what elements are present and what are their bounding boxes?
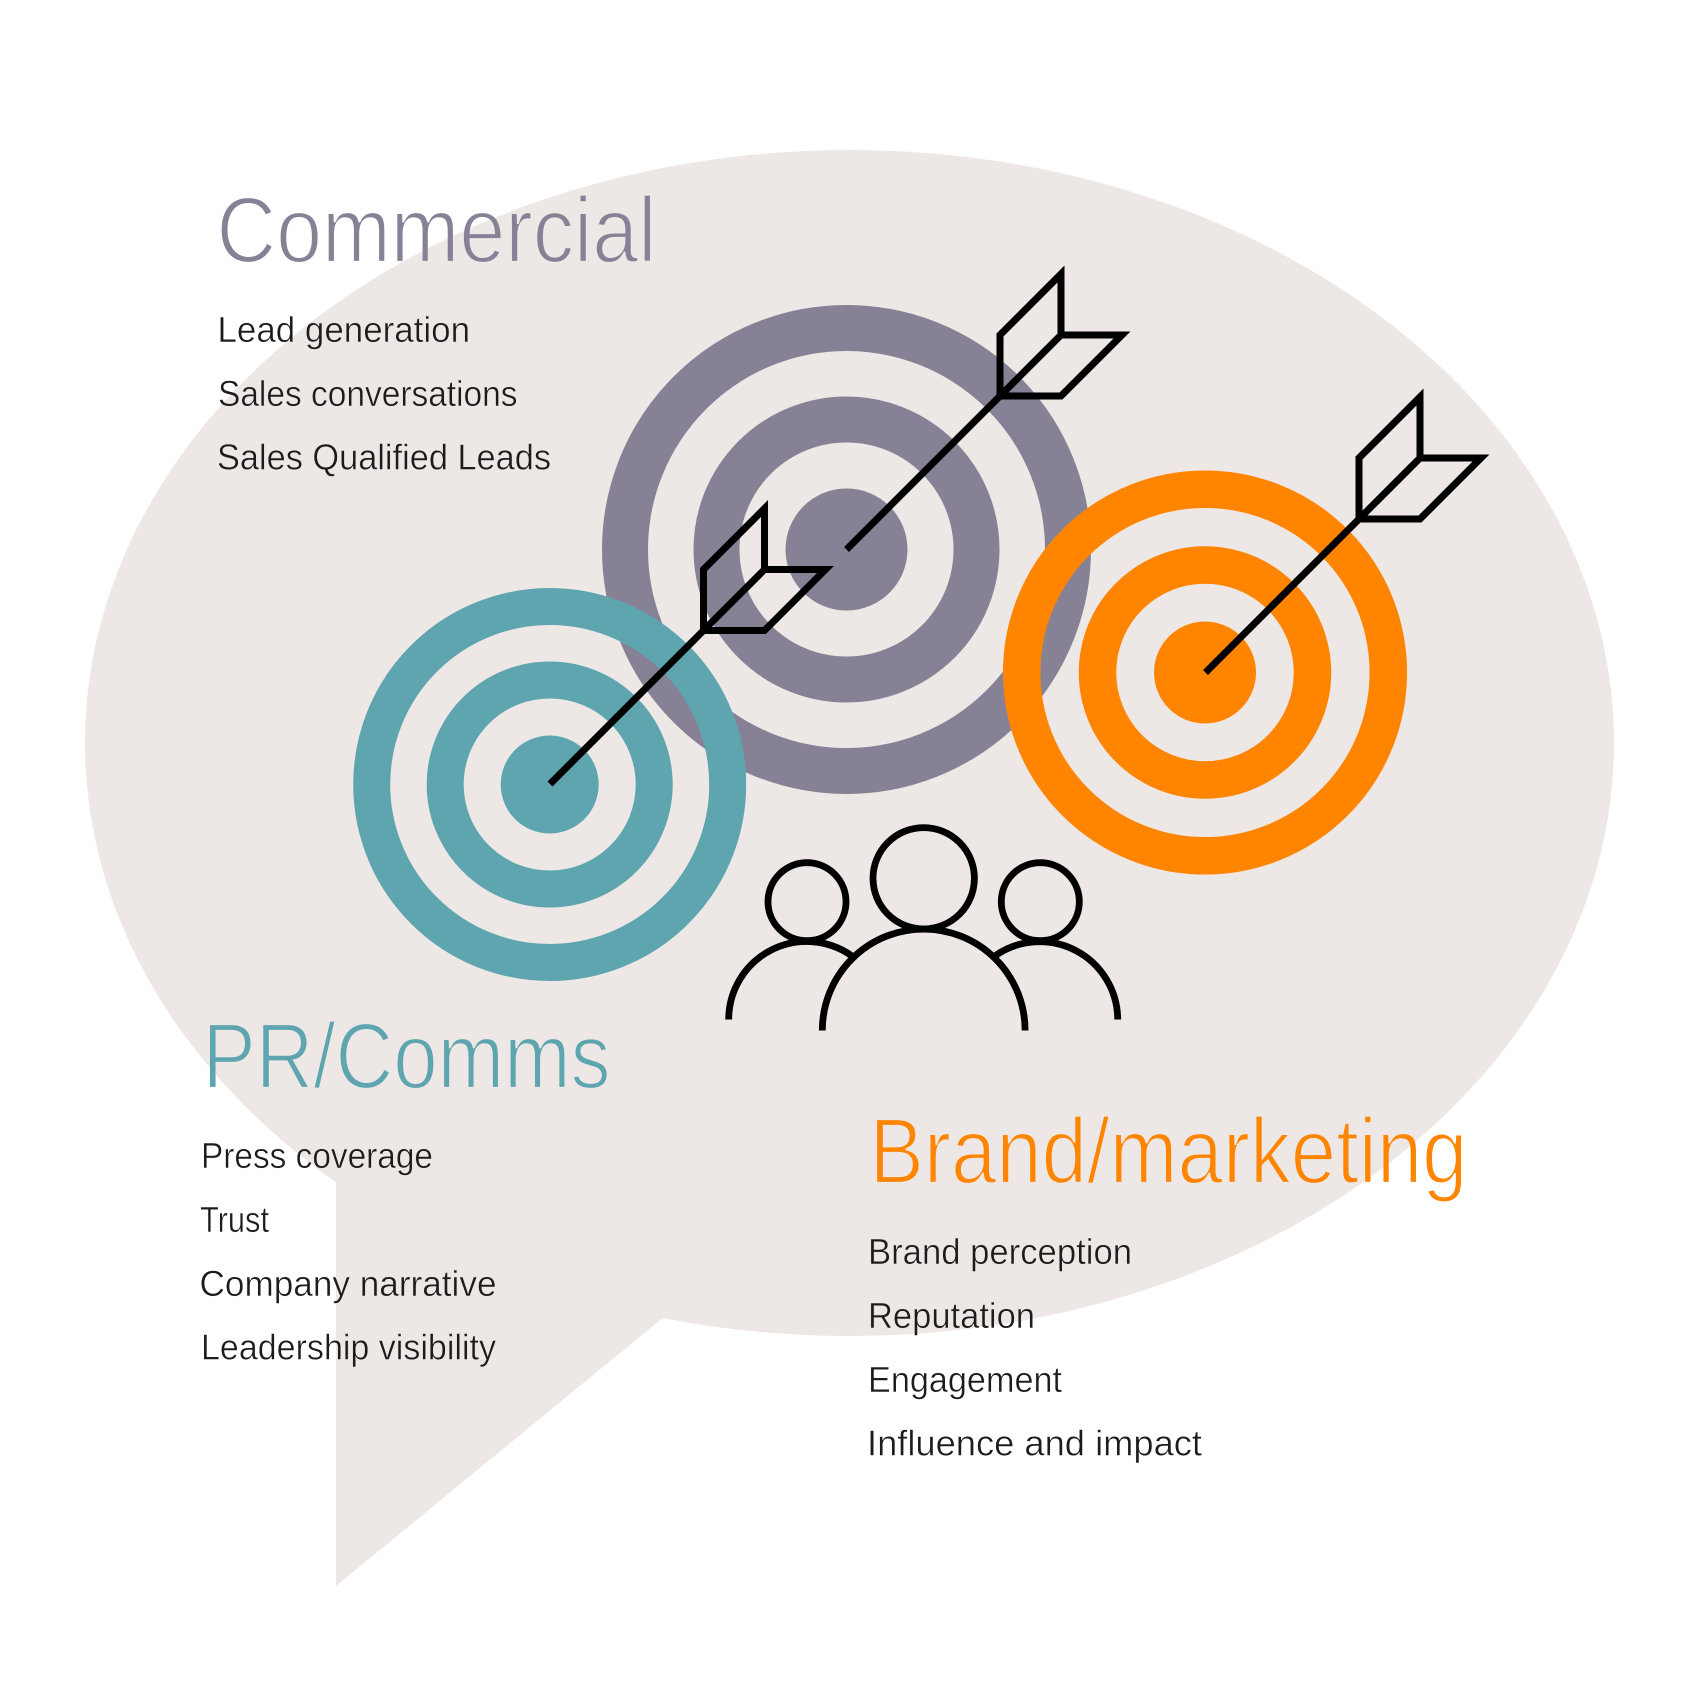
list: commercial outcomes: Lead generation: [218, 309, 470, 350]
list: commercial outcomes: Sales conversations: [218, 373, 518, 414]
arrow: in teal target: [550, 508, 826, 784]
target: PR/comms (teal): [372, 606, 728, 962]
list: PR/comms outcomes: Press coverage: [201, 1135, 433, 1176]
list: PR/comms outcomes: Company narrative: [200, 1263, 496, 1304]
icon: group of people: [729, 828, 1118, 1030]
list: PR/comms outcomes: Trust: [200, 1199, 269, 1240]
list: brand/marketing outcomes: [867, 1231, 1202, 1464]
list: brand/marketing outcomes: Engagement: [868, 1359, 1062, 1400]
heading: Commercial: Commercial: [216, 178, 656, 282]
heading: PR/Comms: PR/Comms: [202, 1004, 610, 1108]
list: brand/marketing outcomes: Influence and impact: [867, 1422, 1202, 1464]
heading: Brand/marketing: Brand/marketing: [870, 1099, 1468, 1203]
speech bubble background: [85, 150, 1614, 1586]
list: brand/marketing outcomes: Reputation: [868, 1295, 1035, 1336]
list: PR/comms outcomes: Leadership visibility: [201, 1326, 496, 1368]
arrow: in orange target: [1206, 397, 1481, 672]
list: commercial outcomes: Sales Qualified Leads: [217, 436, 551, 478]
list: PR/comms outcomes: [200, 1135, 496, 1368]
target: brand/marketing (orange): [1022, 489, 1388, 856]
list: brand/marketing outcomes: Brand perception: [868, 1231, 1132, 1272]
arrow: in purple target: [846, 274, 1122, 550]
target: commercial (purple): [625, 328, 1068, 771]
list: commercial outcomes: [217, 309, 551, 478]
